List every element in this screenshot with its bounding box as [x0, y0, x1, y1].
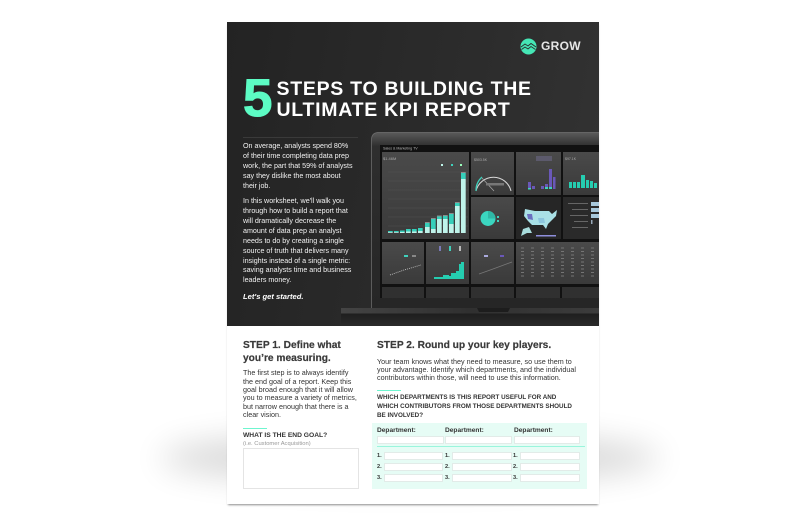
logo: GROW	[520, 38, 581, 54]
panel: stacked bar chart: $1.46M	[383, 156, 396, 161]
step 1 answer box	[243, 448, 359, 489]
laptop base	[341, 308, 599, 326]
page drop shadow	[164, 428, 656, 488]
intro text: needs to do by creating a single	[243, 237, 344, 245]
intro text: source of truth that delivers many	[243, 247, 349, 255]
intro text: through how to build a report that	[243, 207, 348, 215]
step 1 hint: (i.e. Customer Acquisition)	[243, 440, 311, 446]
big number 5: 5	[243, 69, 272, 128]
intro text	[243, 142, 353, 301]
step 1 text: goal broad enough that it will allow	[243, 385, 353, 394]
panels: bottom dashboard row	[382, 287, 599, 298]
panel: departments form: 2.	[513, 464, 518, 470]
step 2 question: WHICH CONTRIBUTORS FROM THOSE DEPARTMENTS SHOULD	[377, 403, 572, 410]
step 2 text: your advantage. Identify which departments, and the individual	[377, 364, 576, 374]
title: STEPS TO BUILDING THE	[276, 78, 532, 100]
laptop bezel	[371, 132, 599, 310]
panel: data table	[516, 242, 599, 284]
panel: departments form: Department:	[445, 427, 484, 434]
panel: departments form: 1.	[445, 453, 450, 459]
step 2 question	[377, 394, 572, 419]
intro text: Let's get started.	[243, 292, 303, 301]
intro text: say they dislike the most about	[243, 172, 341, 180]
panel: gauge: $503.5K	[474, 158, 488, 162]
intro text: will dramatically decrease the	[243, 217, 336, 225]
step 1 text: the end goal of a report. Keep this	[243, 377, 351, 386]
title: ULTIMATE KPI REPORT	[276, 99, 510, 121]
worksheet page	[227, 22, 599, 504]
step 2 question: WHICH DEPARTMENTS IS THIS REPORT USEFUL FOR AND	[377, 394, 556, 401]
intro text: work, the part that 59% of analysts	[243, 162, 353, 170]
intro text: their job.	[243, 182, 270, 190]
panel: departments form: 3.	[377, 475, 382, 481]
step 1 heading	[243, 340, 341, 364]
panel: gauge	[471, 152, 514, 195]
panel: departments form: 3.	[513, 475, 518, 481]
dashboard title: Sales & Marketing TV	[383, 146, 418, 150]
step 1 question: WHAT IS THE END GOAL?	[243, 432, 327, 439]
step 1 text: but narrow enough that there is a	[243, 402, 348, 411]
panel: teal area chart	[426, 242, 469, 284]
department labels: Department:	[377, 427, 416, 434]
panel: US map	[516, 197, 561, 239]
step 1 text: clear vision.	[243, 410, 281, 419]
panel: departments form: 2.	[377, 464, 382, 470]
intro text: On average, analysts spend 80%	[243, 142, 348, 150]
step 2 text: contributors within those, will need to use this information.	[377, 373, 561, 382]
step 1 heading: you’re measuring.	[243, 352, 331, 364]
panel: line chart	[471, 242, 514, 284]
step 2 question: BE INVOLVED?	[377, 412, 423, 419]
panel: teal bar chart	[563, 152, 599, 195]
panel: pie chart	[471, 197, 514, 239]
title	[243, 69, 532, 128]
panel: departments form: 3.	[445, 475, 450, 481]
intro text: of their time completing data prep	[243, 152, 349, 160]
panel: departments form	[372, 423, 587, 489]
logo: GROW: GROW	[541, 39, 581, 53]
intro text: insights instead of a single metric:	[243, 257, 350, 265]
panel: departments form: 2.	[445, 464, 450, 470]
panel: teal bar chart: $97.1K	[565, 157, 577, 161]
divider	[377, 446, 585, 447]
panel: departments form: 1.	[513, 453, 518, 459]
step 1 text: you to measure a variety of metrics,	[243, 393, 357, 402]
step 2 accent rule	[377, 390, 401, 391]
panel: horizontal bars	[563, 197, 599, 239]
step 2 text	[377, 357, 576, 382]
dark header panel	[227, 22, 599, 326]
panel: departments form: Department:	[514, 427, 553, 434]
laptop with dashboard	[341, 132, 599, 326]
step 2 text: Your team knows what they need to measure, so use them to	[377, 357, 572, 366]
step 1 text: The first step is to always identify	[243, 368, 348, 377]
panel: dotted line chart	[382, 242, 424, 284]
contributor inputs	[384, 452, 443, 460]
step 1 accent rule	[243, 428, 267, 429]
intro text: In this worksheet, we'll walk you	[243, 197, 344, 205]
intro text: saving analysts time and business	[243, 266, 351, 274]
panel: purple bar chart	[516, 152, 561, 195]
intro text: leaders money.	[243, 276, 291, 284]
panel: stacked bar chart	[382, 152, 469, 239]
step 1 heading: STEP 1. Define what	[243, 340, 341, 351]
step 2 heading: STEP 2. Round up your key players.	[377, 340, 551, 351]
step 1 text	[243, 368, 357, 419]
contributor numbers: 1.	[377, 453, 382, 459]
intro text: amount of data prep an analyst	[243, 227, 341, 235]
intro rule	[243, 137, 358, 138]
department inputs	[377, 436, 444, 444]
